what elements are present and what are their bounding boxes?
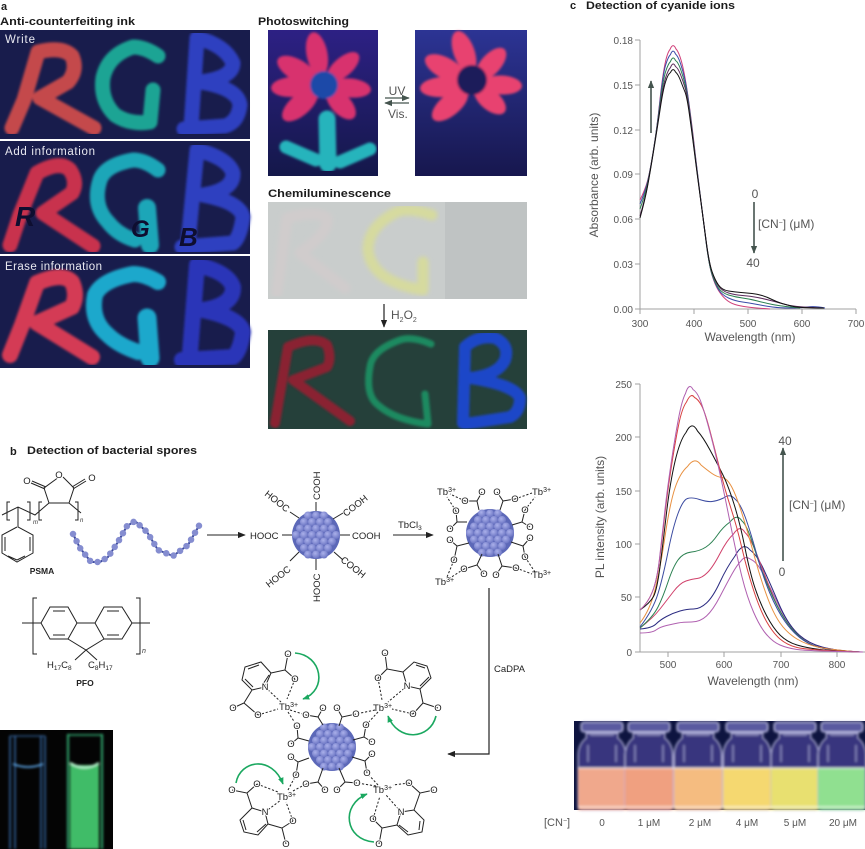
chart: absorbance: 0.09 [614,170,633,181]
chart: absorbance: Absorbance (arb. units) [587,113,601,237]
chart: PL intensity [593,380,865,688]
panel label b and heading: Detection of bacterial spores [27,445,197,457]
chart: PL intensity: 40 [778,434,792,448]
nanoparticle coordinated with terbium: O [461,496,469,507]
chart: absorbance: 0.00 [614,305,633,316]
nanoparticle coordinated with terbium: O [446,524,454,535]
photo: chemiluminescence after [268,330,527,429]
complex: nanoparticle with DPA and terbium: O [409,709,417,720]
complex: nanoparticle with DPA and terbium: Tb [279,702,290,713]
handwritten letters [15,201,198,252]
structure: PSMA: n [80,518,84,524]
nanoparticle coordinated with terbium [435,487,551,588]
nanoparticle with COOH groups: COOH [341,493,370,519]
structure: PSMA [2,470,96,576]
vial concentration labels: [CN [544,817,563,829]
chart: absorbance: ] (μM) [783,217,814,231]
chart: absorbance: 400 [686,319,703,330]
chart: absorbance: 0.18 [614,36,633,47]
panel label b and heading: b [10,446,17,458]
structure: PFO [22,598,150,688]
complex: nanoparticle with DPA and terbium: O [374,673,382,684]
nanoparticle with COOH groups: HOOC [262,489,291,515]
nanoparticle with COOH groups: COOH [338,555,367,581]
nanoparticle coordinated with terbium: O [511,494,519,505]
vial concentration labels: 1 μM [638,818,660,829]
complex: nanoparticle with DPA and terbium: O [363,768,371,779]
vial concentration labels [544,817,857,829]
chart: PL intensity: 250 [615,380,632,391]
nanoparticle coordinated with terbium: O [478,487,486,498]
photo: cuvettes [0,730,113,849]
complex: nanoparticle with DPA and terbium: O [368,749,376,760]
nanoparticle coordinated with terbium: O [526,522,534,533]
nanoparticle coordinated with terbium: Tb [435,577,446,588]
chart: PL intensity: 600 [716,660,733,671]
arrows: UV / visible switching [385,84,409,121]
panel label a: a [1,1,8,13]
complex: nanoparticle with DPA and terbium [228,648,442,849]
nanoparticle coordinated with terbium: 3+ [543,570,551,577]
caption: write: Write [5,34,35,46]
structure: PSMA: O [88,473,96,484]
complex: nanoparticle with DPA and terbium: O [229,703,237,714]
panel: write photo [0,30,250,139]
arrows: UV / visible switching: Vis. [388,107,408,121]
nanoparticle with COOH groups [250,471,381,602]
chart: PL intensity: 800 [829,660,846,671]
chart: PL intensity: Wavelength (nm) [708,674,798,688]
chart: absorbance: 500 [740,319,757,330]
arrow: chain to nanoparticle [207,534,245,536]
complex: nanoparticle with DPA and terbium: O [321,785,329,796]
complex: nanoparticle with DPA and terbium: O [405,778,413,789]
complex: nanoparticle with DPA and terbium: Tb [373,703,384,714]
polymer chain beads [73,521,200,562]
complex: nanoparticle with DPA and terbium: O [302,779,310,790]
structure: PFO: C [88,660,95,671]
handwritten letters: B [179,222,198,252]
complex: nanoparticle with DPA and terbium: O [333,785,341,796]
chart: absorbance: 0.12 [614,126,633,137]
arrow: CaDPA: CaDPA [494,664,526,675]
complex: nanoparticle with DPA and terbium: O [369,814,377,825]
nanoparticle coordinated with terbium: O [452,506,460,517]
chart: absorbance: 0 [752,187,759,201]
arrow: H2O2: H [391,308,400,322]
chart: absorbance: 40 [746,256,760,270]
complex: nanoparticle with DPA and terbium: N [262,807,269,818]
arrow: CaDPA [448,588,526,754]
heading: anti-counterfeiting ink: Anti-counterfeiting ink [0,16,136,28]
nanoparticle coordinated with terbium: O [521,505,529,516]
structure: PFO: H [47,660,54,671]
nanoparticle coordinated with terbium: O [493,487,501,498]
complex: nanoparticle with DPA and terbium: O [287,752,295,763]
heading: photoswitching: Photoswitching [258,16,349,28]
vial concentration labels: − [563,818,567,825]
complex: nanoparticle with DPA and terbium: N [262,682,269,693]
complex: nanoparticle with DPA and terbium: 3+ [288,792,296,799]
structure: PFO: 17 [54,665,61,672]
chart: PL intensity: 0 [779,565,786,579]
chart: absorbance: − [779,220,783,227]
structure: PSMA: m [33,520,38,526]
handwritten letters: R [15,201,36,232]
vial concentration labels: 5 μM [784,818,806,829]
arrow: TbCl3: TbCl [398,520,418,531]
chart: absorbance: 700 [848,319,865,330]
caption: erase information: Erase information [5,261,102,273]
vial concentration labels: 2 μM [689,818,711,829]
structure: PFO: PFO [76,678,94,688]
nanoparticle with COOH groups: HOOC [264,564,293,590]
chart: PL intensity: 100 [615,540,632,551]
structure: PFO: H [98,660,106,671]
structure: PFO: 17 [105,665,113,672]
complex: nanoparticle with DPA and terbium: O [434,703,442,714]
nanoparticle with COOH groups: HOOC [250,531,279,542]
chart: absorbance: 300 [632,319,649,330]
photo: flower with stem [268,30,378,176]
complex: nanoparticle with DPA and terbium: O [287,739,295,750]
photo: flower without stem [415,28,527,176]
panel: add information photo [0,141,250,254]
complex: nanoparticle with DPA and terbium: O [302,710,310,721]
complex: nanoparticle with DPA and terbium: O [381,648,389,659]
complex: nanoparticle with DPA and terbium: O [352,709,360,720]
nanoparticle coordinated with terbium: 3+ [448,487,456,494]
nanoparticle coordinated with terbium: O [526,533,534,544]
structure: PSMA: O [23,476,31,487]
nanoparticle coordinated with terbium: Tb [437,487,448,498]
chart: absorbance: 600 [794,319,811,330]
nanoparticle coordinated with terbium: O [521,552,529,563]
photo: chemiluminescence before [268,202,527,299]
structure: PSMA: PSMA [30,566,54,576]
nanoparticle coordinated with terbium: O [512,563,520,574]
chart: PL intensity: PL intensity (arb. units) [593,456,607,578]
arrow: H2O2: O [404,308,413,322]
arrow: H2O2: 2 [400,317,404,324]
arrow: H2O2: 2 [413,317,417,324]
nanoparticle with COOH groups: HOOC [312,573,323,602]
nanoparticle coordinated with terbium: O [492,570,500,581]
chart: PL intensity: 150 [615,487,632,498]
vial concentration labels: 20 μM [829,818,857,829]
complex: nanoparticle with DPA and terbium: O [253,779,261,790]
chart: PL intensity: 500 [660,660,677,671]
complex: nanoparticle with DPA and terbium: 3+ [290,702,298,709]
structure: PFO: C [61,660,68,671]
nanoparticle coordinated with terbium: Tb [532,487,543,498]
chart: absorbance [587,36,865,344]
complex: nanoparticle with DPA and terbium: O [292,770,300,781]
vial concentration labels: 0 [599,818,605,829]
complex: nanoparticle with DPA and terbium: O [353,778,361,789]
structure: PSMA: O [55,470,63,481]
arrow: H2O2 [384,304,417,327]
chart: absorbance: [CN [758,217,779,231]
nanoparticle coordinated with terbium: O [460,564,468,575]
arrow: TbCl3 [393,520,433,535]
complex: nanoparticle with DPA and terbium: O [228,785,236,796]
handwritten letters: G [131,216,150,243]
nanoparticle coordinated with terbium: O [480,569,488,580]
complex: nanoparticle with DPA and terbium: O [430,785,438,796]
arrows: UV / visible switching: UV [389,84,405,98]
complex: nanoparticle with DPA and terbium: O [319,703,327,714]
complex: nanoparticle with DPA and terbium: O [362,720,370,731]
nanoparticle coordinated with terbium: O [450,555,458,566]
complex: nanoparticle with DPA and terbium: O [284,649,292,660]
complex: nanoparticle with DPA and terbium: N [404,681,411,692]
complex: nanoparticle with DPA and terbium: O [368,737,376,748]
chart: absorbance: 0.06 [614,215,633,226]
panel label c and heading: c [570,0,576,12]
complex: nanoparticle with DPA and terbium: O [333,703,341,714]
nanoparticle coordinated with terbium: 3+ [543,487,551,494]
chart: PL intensity: 0 [626,648,632,659]
nanoparticle with COOH groups: COOH [352,531,381,542]
complex: nanoparticle with DPA and terbium: 3+ [384,703,392,710]
chart: absorbance: Wavelength (nm) [705,330,795,344]
complex: nanoparticle with DPA and terbium: O [291,674,299,685]
arrow: TbCl3: 3 [418,525,422,532]
vial concentration labels: 4 μM [736,818,758,829]
complex: nanoparticle with DPA and terbium: Tb [373,785,384,796]
complex: nanoparticle with DPA and terbium: O [254,710,262,721]
structure: PFO: 8 [68,665,72,672]
nanoparticle coordinated with terbium: 3+ [446,577,454,584]
chart: PL intensity: 200 [615,433,632,444]
structure: PFO: 8 [95,665,99,672]
complex: nanoparticle with DPA and terbium: Tb [277,792,288,803]
nanoparticle coordinated with terbium: O [446,535,454,546]
complex: nanoparticle with DPA and terbium: 3+ [384,785,392,792]
vial concentration labels: ] [567,817,570,829]
chart: PL intensity: 700 [773,660,790,671]
nanoparticle with COOH groups: COOH [312,471,323,500]
complex: nanoparticle with DPA and terbium: O [289,816,297,827]
chart: absorbance: 0.03 [614,260,633,271]
complex: nanoparticle with DPA and terbium: O [293,721,301,732]
chart: PL intensity: ] (μM) [814,498,845,512]
heading: chemiluminescence: Chemiluminescence [268,188,391,200]
nanoparticle coordinated with terbium: Tb [532,570,543,581]
complex: nanoparticle with DPA and terbium: N [398,807,405,818]
chart: PL intensity: − [810,501,814,508]
caption: add information: Add information [5,146,95,158]
chart: PL intensity: [CN [789,498,810,512]
photo: vials [574,721,865,810]
chart: absorbance: 0.15 [614,81,633,92]
panel label c and heading: Detection of cyanide ions [586,0,735,12]
structure: PFO: n [142,648,146,655]
panel: erase information photo [0,256,250,368]
chart: PL intensity: 50 [621,593,632,604]
